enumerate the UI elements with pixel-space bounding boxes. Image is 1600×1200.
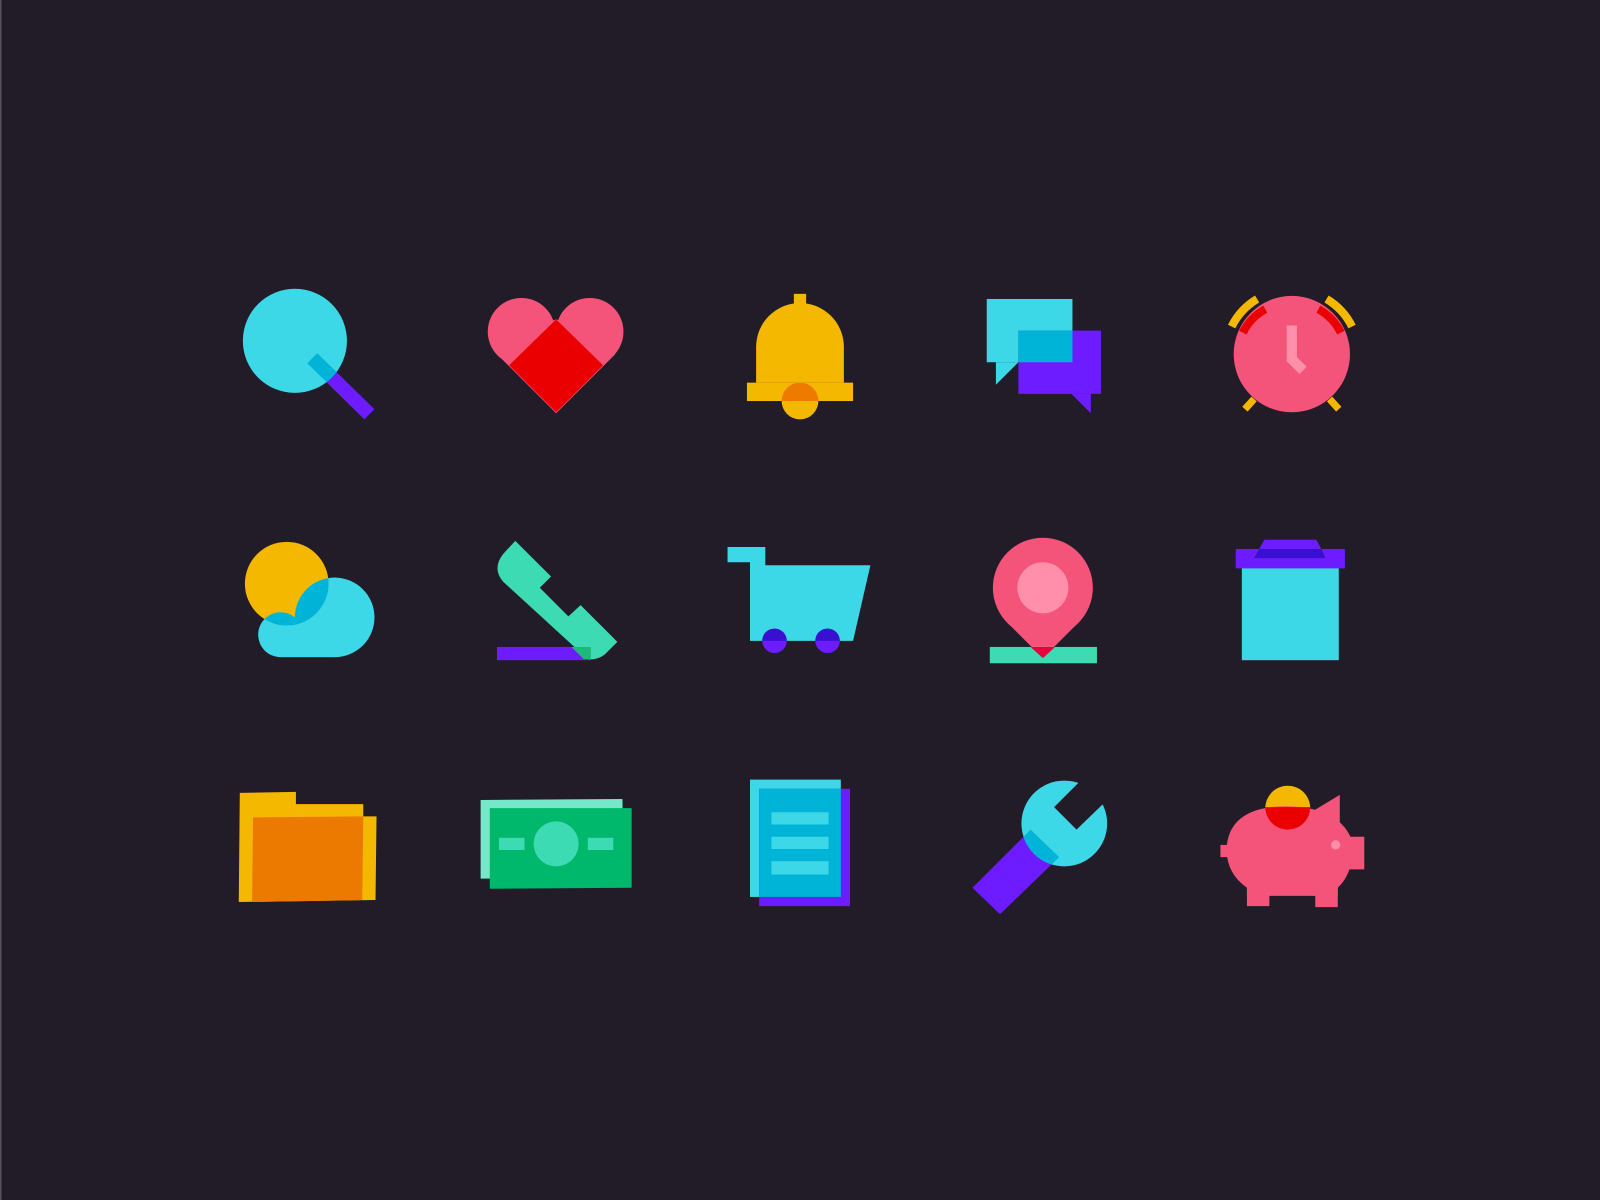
icon: bell	[747, 294, 853, 419]
icon: cart	[728, 547, 870, 653]
icon: piggy bank	[1220, 786, 1364, 907]
icon: weather	[245, 542, 374, 657]
icon: wrench	[972, 776, 1108, 914]
icon: search	[243, 289, 369, 414]
icon: phone	[497, 541, 617, 660]
icon: folder	[239, 792, 377, 902]
icon: trash	[1236, 540, 1345, 660]
icon: location pin	[990, 538, 1097, 663]
icon: heart	[488, 298, 623, 413]
icon: alarm clock	[1232, 296, 1352, 412]
icon: money	[481, 799, 632, 889]
icon: chat	[987, 299, 1101, 413]
icon: document	[750, 780, 850, 906]
